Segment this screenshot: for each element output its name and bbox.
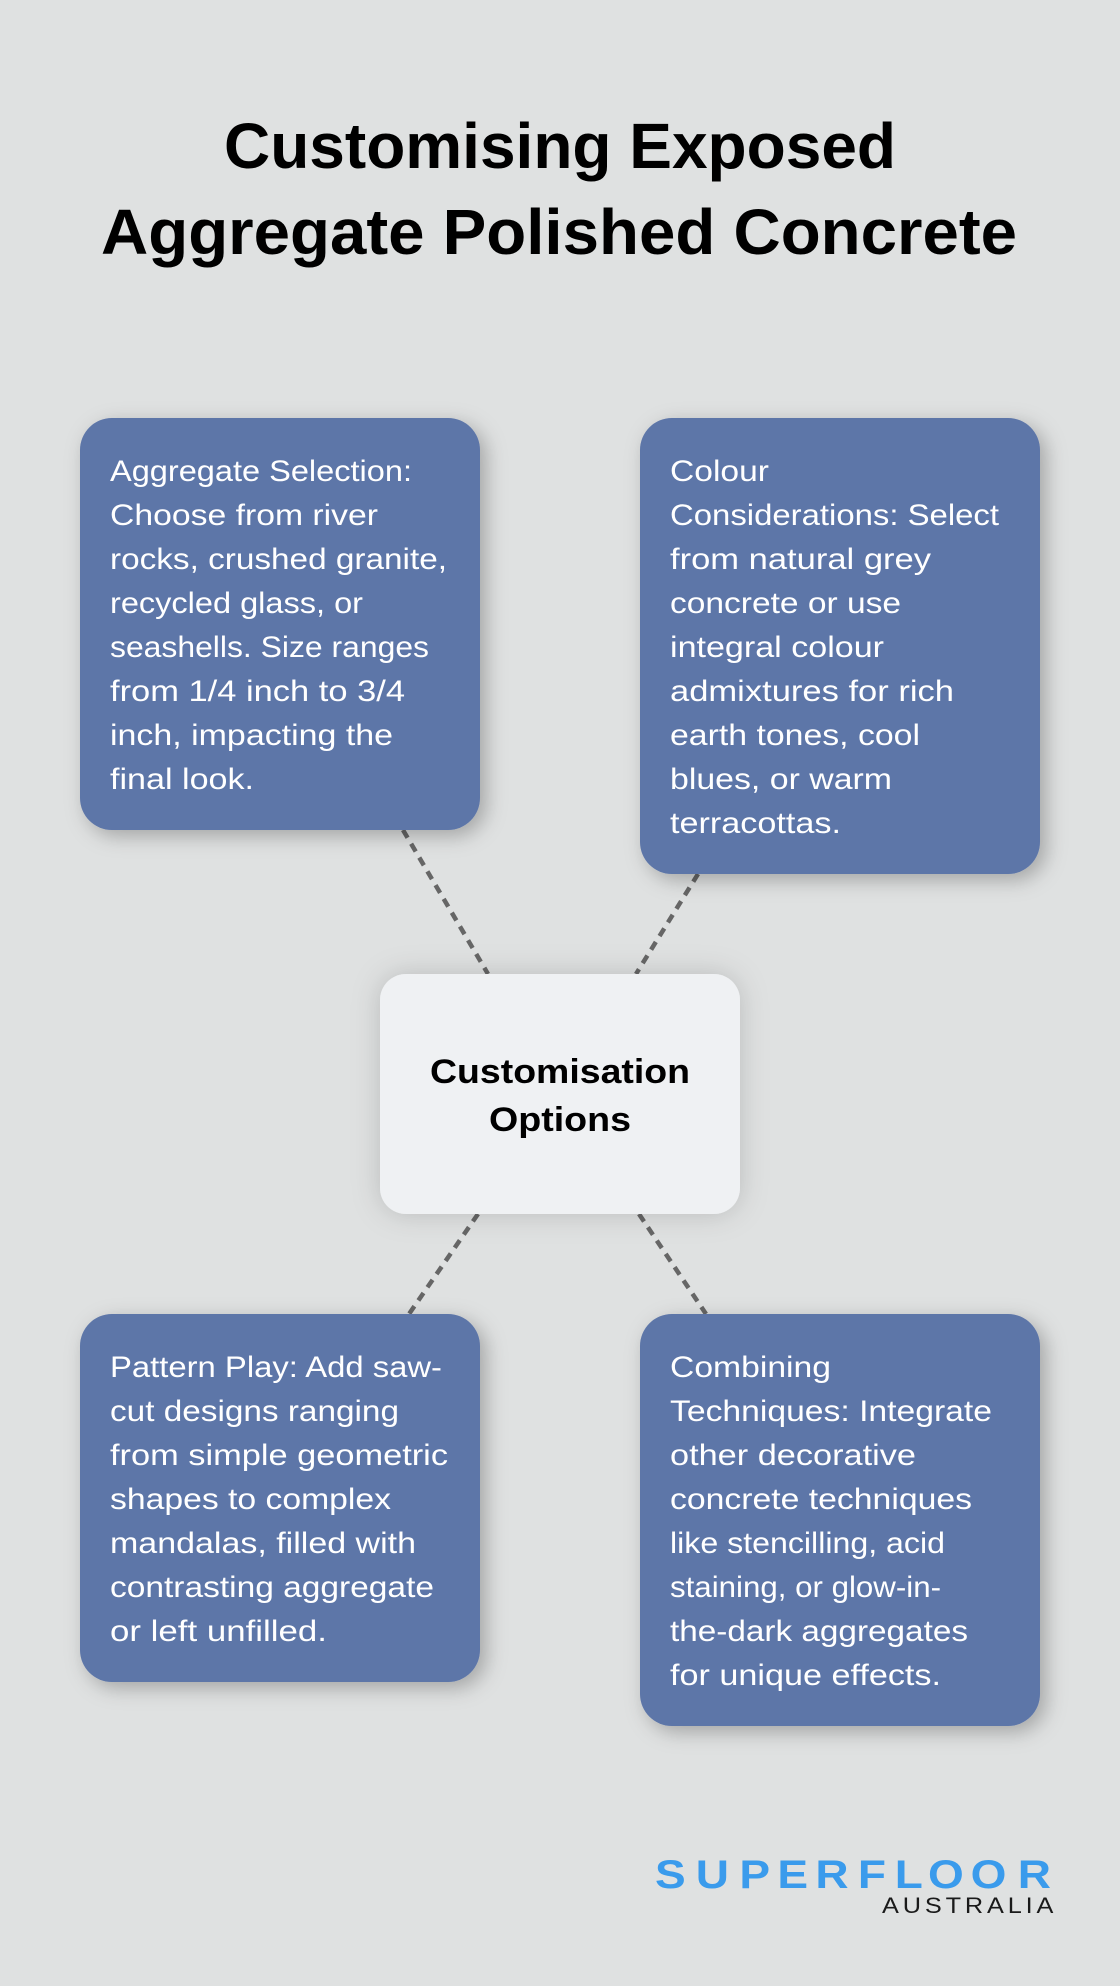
panel: customisation options centre: Options — [489, 1101, 631, 1139]
panel: colour considerations: concrete or use — [670, 587, 901, 620]
panel: customisation options centre — [380, 974, 740, 1214]
connector: colour considerations to centre — [636, 874, 698, 974]
panel: pattern play: contrasting aggregate — [110, 1571, 434, 1604]
panel: aggregate selection: seashells. Size ranges — [110, 631, 429, 664]
title: Aggregate Polished Concrete — [101, 196, 1017, 268]
panel: pattern play: Pattern Play: Add saw- — [110, 1351, 442, 1384]
panel: aggregate selection: Aggregate Selection: — [110, 455, 412, 488]
panel: pattern play — [80, 1314, 480, 1682]
panel: pattern play: mandalas, filled with — [110, 1527, 416, 1560]
panel: colour considerations: admixtures for rich — [670, 675, 954, 708]
logo: Superfloor Australia: AUSTRALIA — [882, 1894, 1054, 1919]
panel: aggregate selection: rocks, crushed granite, — [110, 543, 447, 576]
panel: combining techniques: concrete techniques — [670, 1483, 972, 1516]
connector: combining techniques to centre — [639, 1214, 706, 1314]
panel: colour considerations: terracottas. — [670, 807, 841, 840]
panel: combining techniques: other decorative — [670, 1439, 916, 1472]
panel: colour considerations: earth tones, cool — [670, 719, 920, 752]
panel: combining techniques: the-dark aggregates — [670, 1615, 968, 1648]
panel: combining techniques: Techniques: Integrate — [670, 1395, 992, 1428]
panel: combining techniques: Combining — [670, 1351, 831, 1384]
connector: pattern play to centre — [409, 1214, 478, 1314]
logo: Superfloor Australia — [655, 1853, 1054, 1919]
title — [101, 110, 1017, 268]
panel: pattern play: shapes to complex — [110, 1483, 391, 1516]
panel: customisation options centre: Customisation — [430, 1053, 690, 1091]
panel: pattern play: or left unfilled. — [110, 1615, 327, 1648]
panel: combining techniques: like stencilling, acid — [670, 1527, 945, 1560]
panel: colour considerations: blues, or warm — [670, 763, 892, 796]
panel: pattern play: cut designs ranging — [110, 1395, 399, 1428]
panel: aggregate selection: inch, impacting the — [110, 719, 393, 752]
panel: combining techniques: for unique effects. — [670, 1659, 941, 1692]
title: Customising Exposed — [224, 110, 896, 182]
panel: combining techniques: staining, or glow-in- — [670, 1571, 941, 1604]
connector: aggregate selection to centre — [403, 830, 488, 974]
logo: Superfloor Australia: SUPERFLOOR — [655, 1853, 1051, 1897]
panel: aggregate selection — [80, 418, 480, 830]
panel: aggregate selection: final look. — [110, 763, 254, 796]
panel: pattern play: from simple geometric — [110, 1439, 448, 1472]
panel: combining techniques — [640, 1314, 1040, 1726]
panel: colour considerations: from natural grey — [670, 543, 931, 576]
panel: colour considerations: Considerations: Select — [670, 499, 1000, 532]
panel: colour considerations: integral colour — [670, 631, 884, 664]
panel: colour considerations: Colour — [670, 455, 769, 488]
panel: aggregate selection: recycled glass, or — [110, 587, 363, 620]
panel: aggregate selection: from 1/4 inch to 3/4 — [110, 675, 405, 708]
panel: aggregate selection: Choose from river — [110, 499, 378, 532]
panel: colour considerations — [640, 418, 1040, 874]
